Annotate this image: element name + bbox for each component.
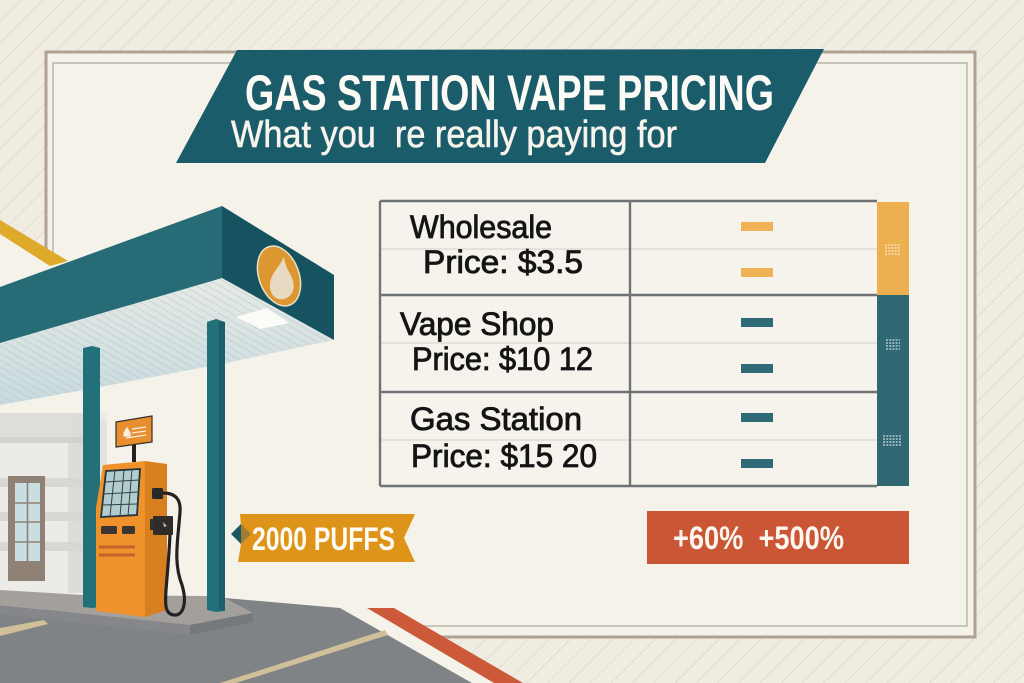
side bar: wholesale (877, 202, 909, 295)
table grid (380, 201, 877, 486)
markup label: +60% +500% (673, 520, 844, 556)
gas station dashes (741, 413, 773, 468)
building (0, 413, 107, 593)
right column (207, 319, 225, 612)
diamond marker (231, 524, 251, 544)
canopy side fascia (222, 206, 334, 340)
markup percentage box (647, 511, 909, 564)
pump buttons (101, 526, 135, 534)
left column (83, 346, 100, 608)
gas station row label: Gas Station (410, 401, 582, 437)
subtitle: What you re really paying for (231, 114, 677, 156)
wholesale row label: Wholesale (410, 209, 552, 245)
paper panel with frame (46, 52, 975, 637)
row separators (380, 249, 877, 440)
vape shop dashes (741, 318, 773, 373)
fuel pump (96, 416, 184, 617)
side bar: vape shop (877, 295, 909, 392)
scene background (0, 226, 494, 683)
pump vents (99, 547, 135, 555)
wholesale dashes (741, 222, 773, 277)
canopy logo (250, 240, 308, 312)
pump island (0, 590, 253, 635)
pump body (96, 461, 145, 617)
vape shop row label: Vape Shop (400, 306, 554, 342)
vape shop row label: Price: $10 12 (412, 341, 593, 377)
title banner (176, 49, 824, 163)
gas station illustration (0, 206, 523, 683)
pump screen (101, 469, 140, 517)
yellow accent stripe (0, 220, 68, 266)
puffs label: 2000 PUFFS (252, 521, 395, 557)
title: GAS STATION VAPE PRICING (245, 65, 774, 121)
canopy ceiling (0, 278, 334, 405)
wholesale row label: Price: $3.5 (423, 244, 583, 280)
price table (380, 201, 909, 486)
puffs ribbon badge (231, 514, 415, 562)
vape shop row label (400, 306, 593, 377)
canopy light (236, 308, 289, 329)
pump nozzle and hose (150, 488, 184, 615)
canopy front fascia (0, 206, 222, 343)
wholesale row label (410, 209, 583, 280)
asphalt road (0, 598, 472, 683)
parking lines (0, 620, 388, 683)
gas station row label: Price: $15 20 (411, 438, 597, 474)
side bar: gas station (877, 392, 909, 486)
window (8, 476, 45, 581)
gas station row label (410, 401, 597, 474)
red stripe (367, 608, 523, 683)
pump sign (116, 416, 152, 462)
